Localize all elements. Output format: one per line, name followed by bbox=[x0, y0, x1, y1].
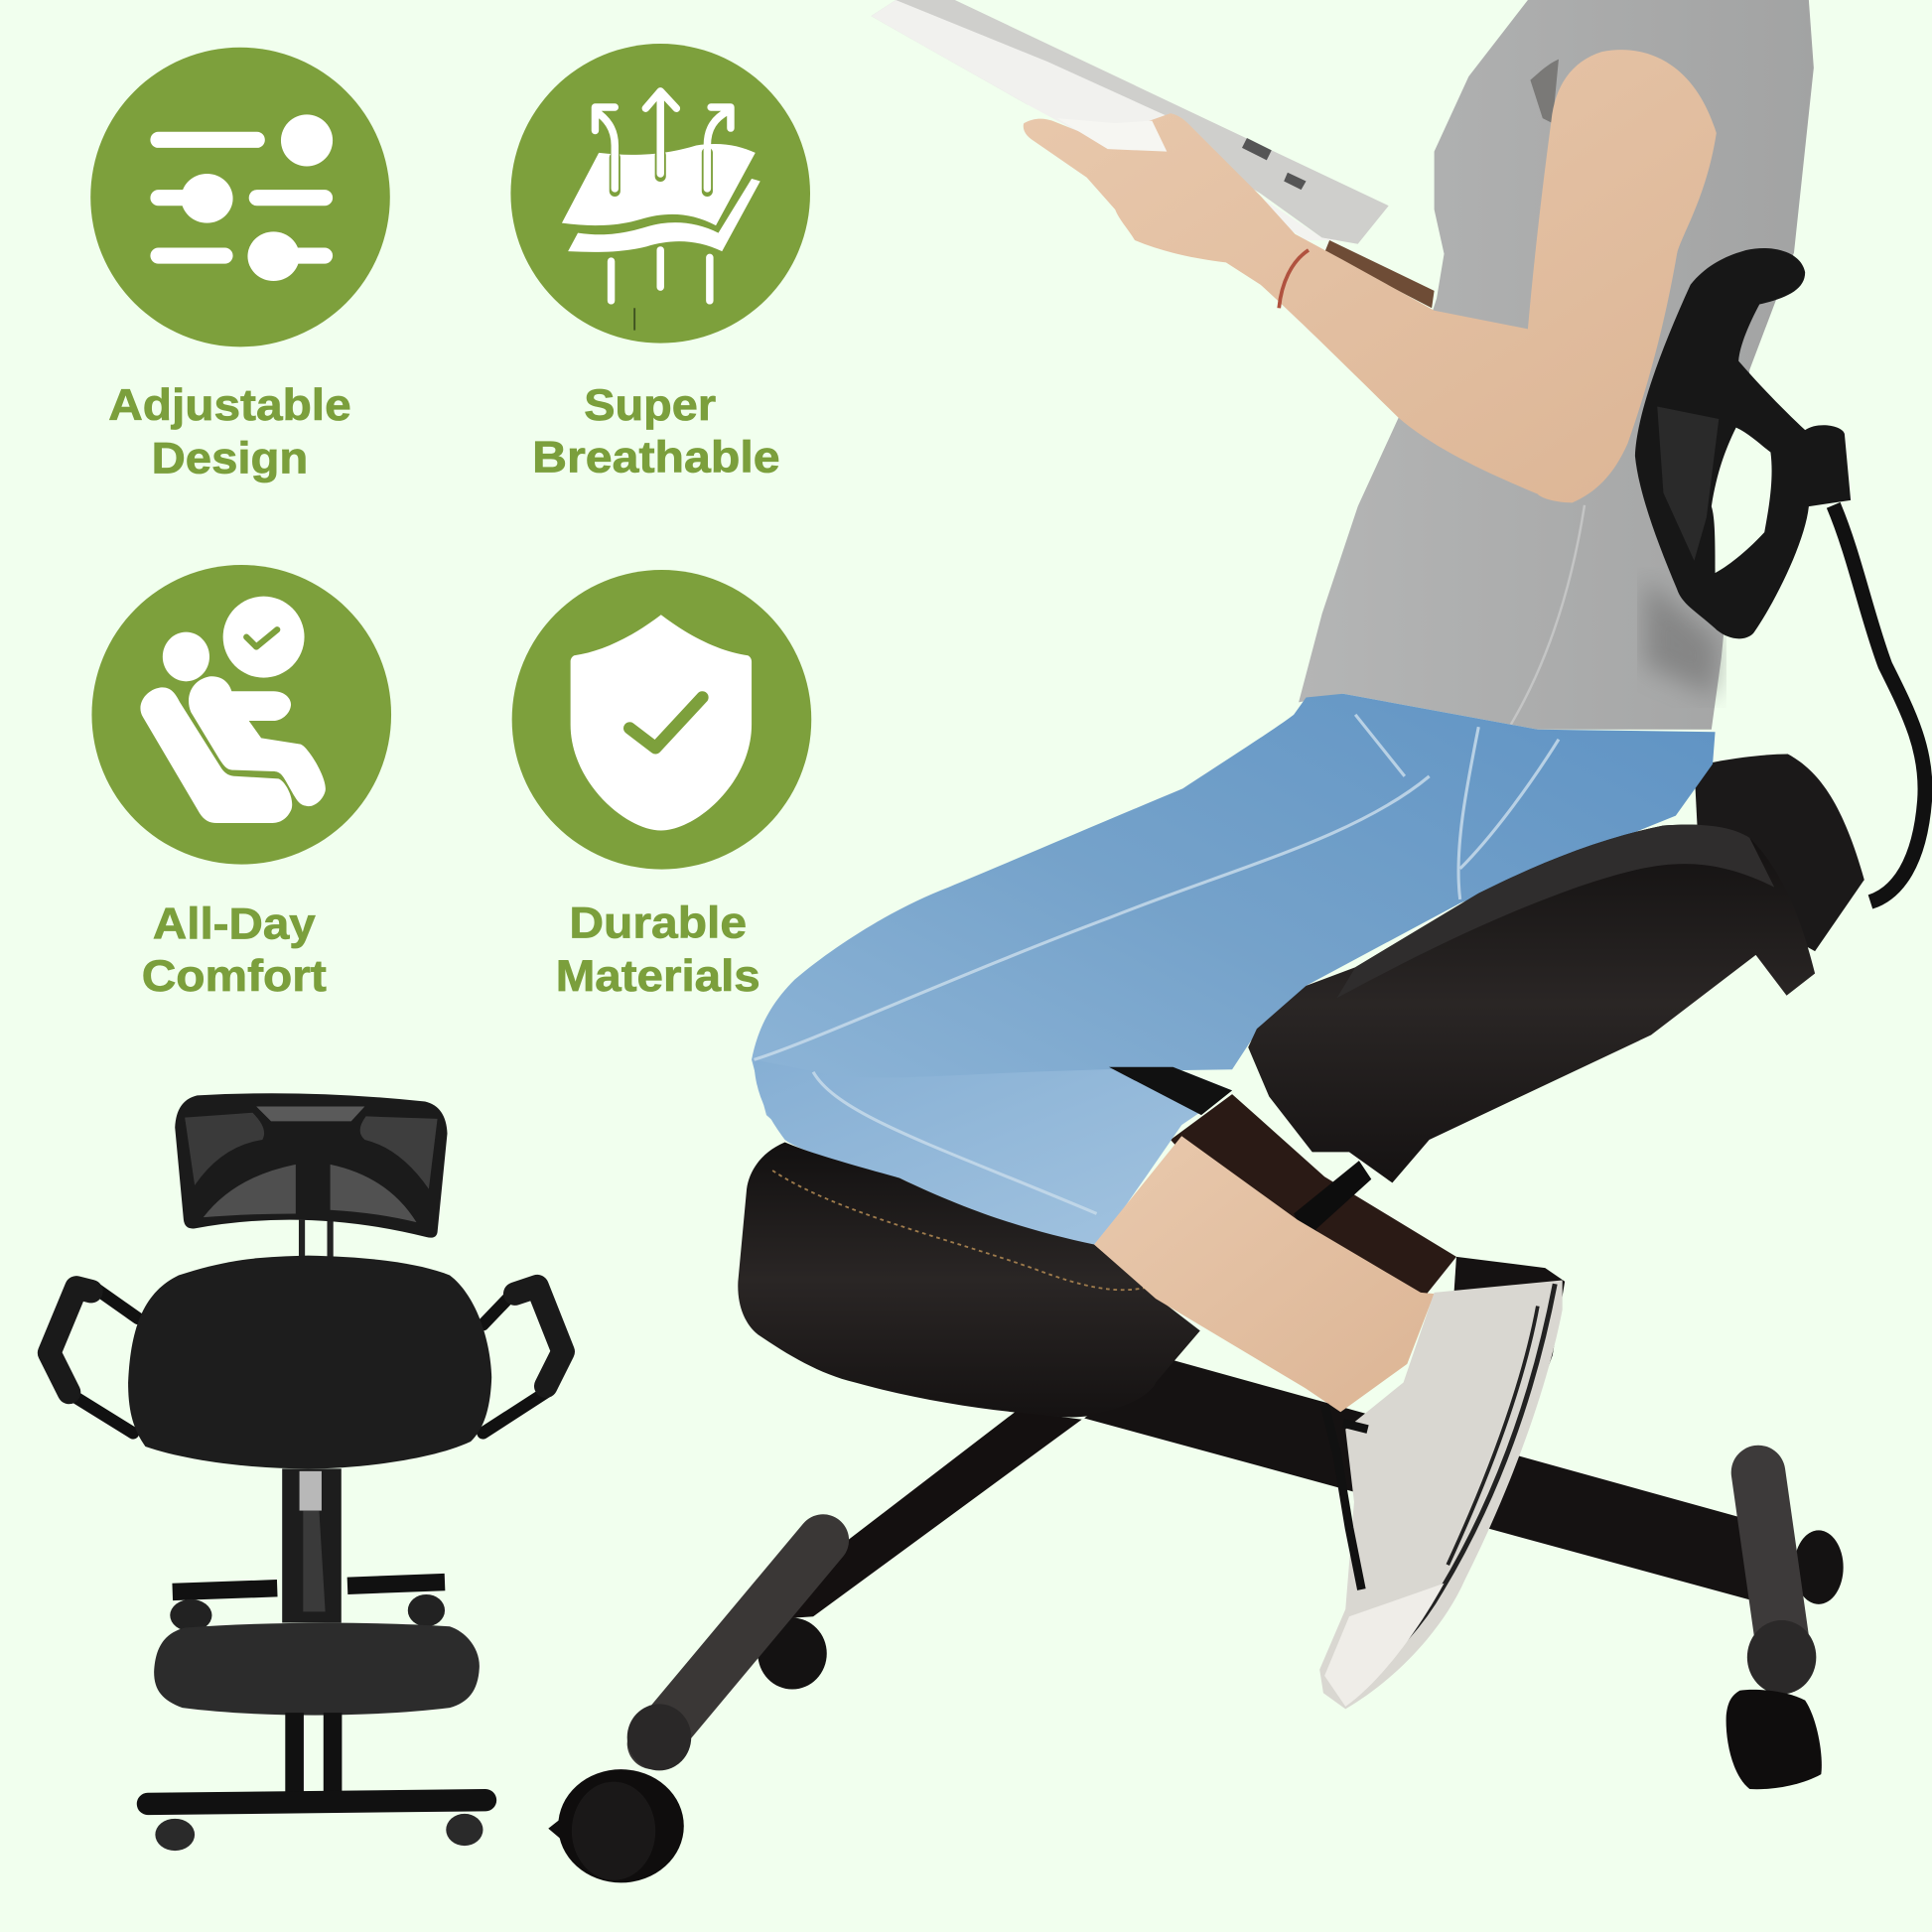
label: all-day comfort: Comfort bbox=[142, 952, 327, 1001]
rear foot tube bbox=[1747, 1472, 1816, 1694]
label: durable materials: Materials bbox=[556, 952, 760, 1001]
shadow on shirt bbox=[1645, 579, 1719, 696]
back posts bbox=[302, 1220, 331, 1263]
feature: durable materials bbox=[512, 570, 811, 1001]
label: all-day comfort bbox=[142, 900, 327, 1001]
shirt seam bbox=[1509, 505, 1585, 727]
icon: seated person with check bbox=[91, 565, 391, 865]
front strut bbox=[742, 1411, 1082, 1621]
jeans upper leg bbox=[752, 694, 1716, 1182]
front foot tube bbox=[627, 1540, 823, 1770]
label: super breathable: Super bbox=[584, 381, 716, 430]
front legs and foot bar bbox=[148, 1713, 485, 1851]
seat cushion bbox=[128, 1256, 491, 1468]
backrest cord bbox=[1834, 505, 1925, 901]
label: all-day comfort: All-Day bbox=[153, 900, 316, 949]
seat post bbox=[282, 1468, 342, 1622]
jeans seams bbox=[755, 715, 1559, 1213]
white pages between thumb and fingers bbox=[1057, 118, 1167, 152]
label: super breathable bbox=[532, 381, 780, 482]
cushion stitching bbox=[772, 1171, 1146, 1290]
icon: shield with check bbox=[512, 570, 811, 870]
feature: super breathable bbox=[510, 44, 810, 482]
diagonal support bbox=[1171, 1094, 1456, 1307]
rear ground caster bbox=[1726, 1690, 1822, 1789]
label: durable materials: Durable bbox=[569, 898, 747, 947]
shoe heel bbox=[1453, 1257, 1565, 1442]
icon: sliders bbox=[90, 48, 390, 346]
calf bbox=[1094, 1136, 1435, 1412]
product photo: chair side view and person bbox=[548, 0, 1925, 1882]
shoe bbox=[1319, 1280, 1563, 1709]
rear shin cushion bbox=[1694, 755, 1864, 951]
label: adjustable design: Design bbox=[152, 435, 308, 483]
t-shirt bbox=[1299, 0, 1814, 730]
product photo: chair front view bbox=[50, 1093, 563, 1851]
sleeve interior bbox=[1530, 60, 1559, 123]
jeans lower leg bbox=[755, 1059, 1232, 1247]
wrist band bbox=[1279, 250, 1309, 308]
front knee cushion bbox=[738, 1142, 1200, 1417]
knee pad bbox=[154, 1623, 480, 1716]
book back bbox=[1324, 240, 1435, 308]
feature: all-day comfort bbox=[91, 565, 391, 1001]
arm and hand bbox=[1024, 50, 1717, 502]
side handles bbox=[50, 1287, 563, 1433]
icon: breathable layers with arrows bbox=[510, 44, 810, 344]
label: durable materials bbox=[556, 898, 760, 1001]
feature: adjustable design bbox=[90, 48, 390, 483]
cushion highlight bbox=[1337, 825, 1774, 998]
seat cushion bbox=[1248, 825, 1815, 1182]
backrest bbox=[175, 1093, 448, 1238]
label: super breathable: Breathable bbox=[532, 433, 780, 482]
front caster bbox=[548, 1769, 684, 1882]
label: adjustable design bbox=[108, 381, 351, 483]
rear caster bbox=[1794, 1530, 1844, 1604]
small front caster bbox=[758, 1618, 827, 1690]
main beam bbox=[1084, 1358, 1757, 1601]
thigh shadow bbox=[1109, 1067, 1232, 1115]
book bbox=[871, 0, 1389, 244]
support bar bbox=[1294, 1161, 1392, 1318]
rear foot bar and casters bbox=[170, 1583, 445, 1631]
label: adjustable design: Adjustable bbox=[108, 381, 351, 430]
backrest bbox=[1635, 248, 1851, 638]
